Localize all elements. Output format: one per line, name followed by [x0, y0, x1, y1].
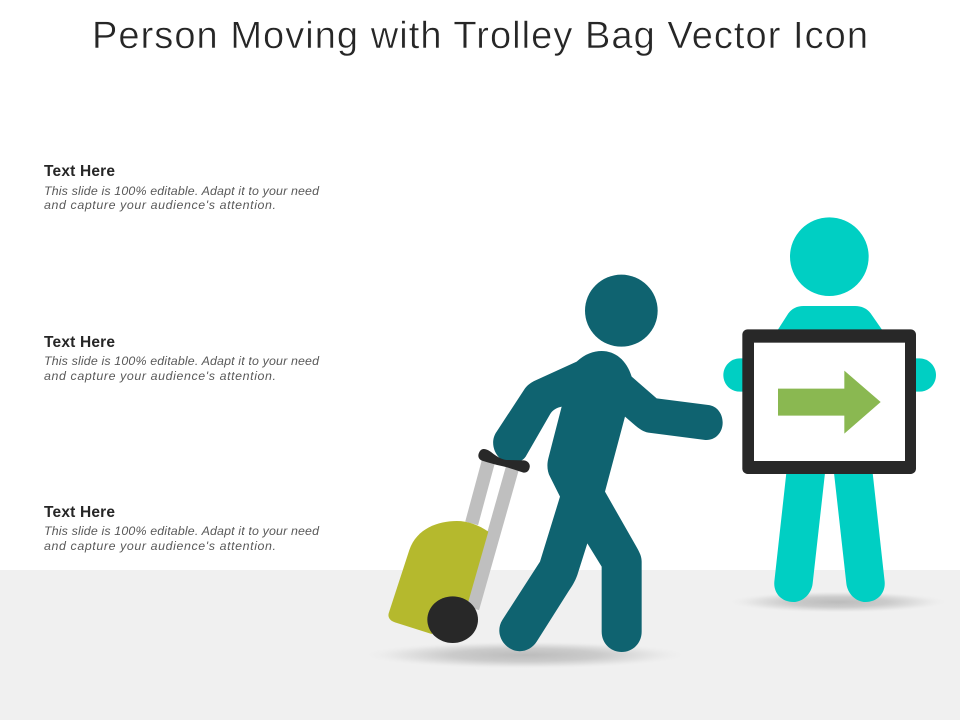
sign frame — [742, 329, 916, 474]
description 1: and capture your audience's attention. — [44, 198, 276, 212]
text block 3 — [44, 504, 320, 553]
shadow under walking person — [360, 641, 690, 669]
bag body — [388, 521, 488, 634]
walking person — [478, 275, 723, 652]
body — [493, 351, 723, 652]
luggage handle — [478, 449, 530, 473]
right leg — [834, 470, 885, 602]
left hand — [723, 358, 745, 392]
wheel — [427, 596, 478, 643]
head — [790, 217, 869, 296]
description 3 — [44, 524, 320, 553]
description 1 — [44, 184, 320, 212]
standing person with sign — [723, 217, 936, 602]
left leg — [774, 470, 825, 602]
heading 3: Text Here — [44, 504, 115, 521]
floor band — [0, 570, 960, 720]
text block 2 — [44, 334, 320, 383]
torso — [777, 306, 883, 332]
heading 1: Text Here — [44, 163, 115, 180]
description 3: This slide is 100% editable. Adapt it to your need — [44, 524, 320, 538]
description 2: and capture your audience's attention. — [44, 369, 276, 383]
description 3: and capture your audience's attention. — [44, 539, 276, 553]
pole back — [472, 462, 488, 523]
title: Person Moving with Trolley Bag Vector Icon — [92, 15, 868, 57]
head — [585, 275, 658, 347]
shadow under standing person — [726, 591, 950, 613]
right hand — [913, 358, 936, 392]
description 1: This slide is 100% editable. Adapt it to your need — [44, 184, 320, 198]
heading 2: Text Here — [44, 334, 115, 351]
text block 1 — [44, 163, 320, 212]
arrow icon — [778, 371, 881, 434]
trolley bag — [388, 462, 512, 643]
description 2 — [44, 354, 320, 383]
sign panel — [754, 343, 905, 461]
pole front — [473, 468, 512, 608]
description 2: This slide is 100% editable. Adapt it to your need — [44, 354, 320, 368]
